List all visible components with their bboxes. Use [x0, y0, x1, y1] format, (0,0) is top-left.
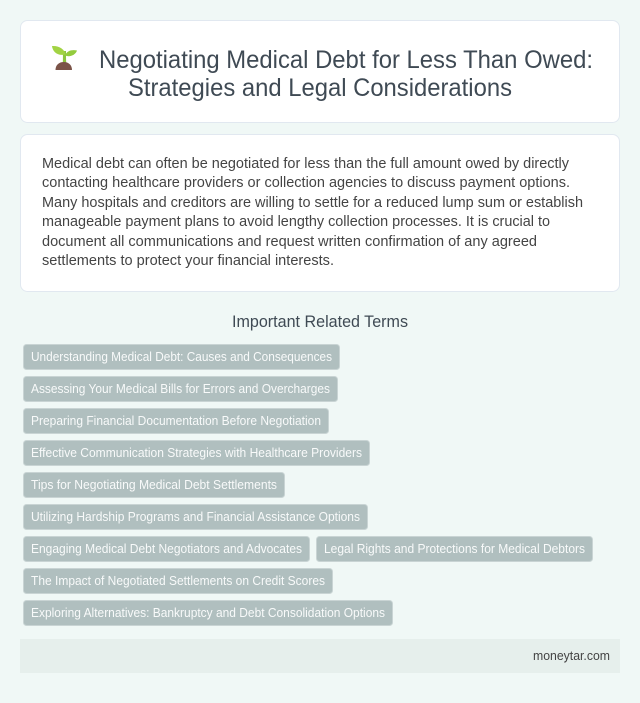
related terms tags	[24, 344, 592, 626]
tag	[316, 536, 592, 562]
tag	[24, 568, 332, 594]
summary text: Medical debt can often be negotiated for less than the full amount owed by directly	[42, 156, 570, 172]
tag: Utilizing Hardship Programs and Financial Assistance Options	[31, 510, 360, 524]
summary text: manageable payment plans to avoid lengthy collection processes. It is crucial to	[42, 214, 550, 230]
summary text: settlements to protect your financial interests.	[42, 253, 334, 269]
tag	[24, 600, 392, 626]
tag: Preparing Financial Documentation Before Negotiation	[31, 414, 321, 428]
tag	[24, 504, 368, 530]
footer	[20, 639, 620, 673]
tag: Understanding Medical Debt: Causes and Consequences	[31, 350, 332, 364]
icon: seedling	[52, 46, 77, 70]
footer: moneytar.com	[533, 648, 610, 663]
tag: Legal Rights and Protections for Medical Debtors	[324, 542, 585, 556]
tag	[24, 408, 328, 434]
title: Strategies and Legal Considerations	[128, 74, 512, 102]
tag	[24, 536, 310, 562]
heading: related terms: Important Related Terms	[232, 313, 408, 331]
summary text: Many hospitals and creditors are willing to settle for a reduced lump sum or establish	[42, 195, 583, 211]
tag: Tips for Negotiating Medical Debt Settlements	[31, 478, 277, 492]
panel: title card	[20, 20, 620, 122]
tag	[24, 376, 338, 402]
tag: Effective Communication Strategies with Healthcare Providers	[31, 446, 362, 460]
tag: Engaging Medical Debt Negotiators and Advocates	[31, 542, 302, 556]
tag	[24, 344, 340, 370]
tag	[24, 472, 284, 498]
panel: summary	[20, 134, 620, 292]
summary text: contacting healthcare providers or collection agencies to discuss payment options.	[42, 175, 570, 191]
title: Negotiating Medical Debt for Less Than Owed:	[99, 46, 593, 74]
tag: The Impact of Negotiated Settlements on Credit Scores	[31, 574, 325, 588]
title	[99, 46, 593, 102]
tag	[24, 440, 370, 466]
tag: Assessing Your Medical Bills for Errors and Overcharges	[31, 382, 330, 396]
summary text: document all communications and request written confirmation of any agreed	[42, 234, 537, 250]
tag: Exploring Alternatives: Bankruptcy and Debt Consolidation Options	[31, 606, 385, 620]
summary text	[42, 156, 583, 269]
